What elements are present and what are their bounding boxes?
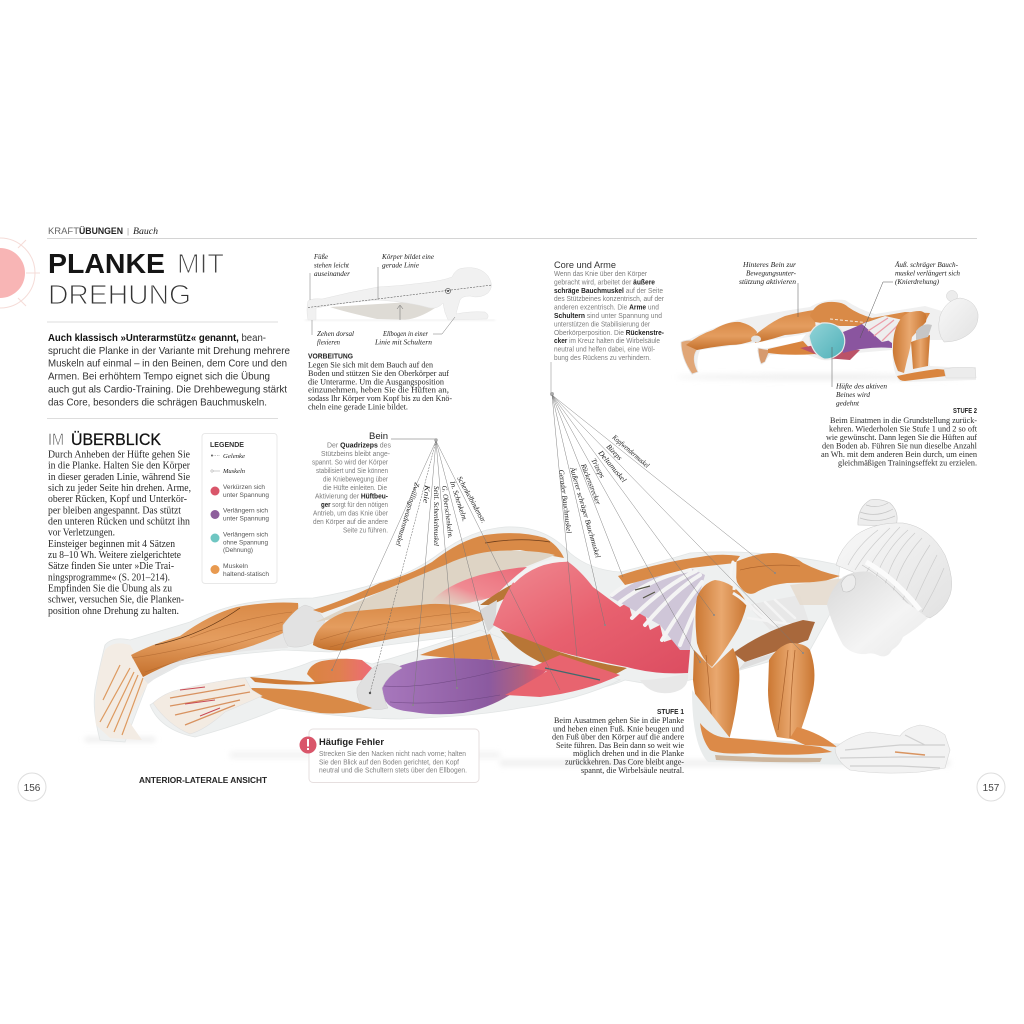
- overview text block: position ohne Drehung zu halten.: [48, 606, 179, 617]
- forearm or upper arm lower section: [693, 648, 739, 740]
- overview text block: Sätze finden Sie unter »Die Trai-: [48, 561, 174, 572]
- text block: Vorbeitung: Boden und stützen Sie den Oberkörper auf: [308, 368, 449, 378]
- panel: legend: [202, 434, 277, 584]
- leg muscle labels: [394, 475, 488, 547]
- step 2 callouts: gedehnt: [836, 398, 860, 408]
- text block: Stufe 1: zurückkehren. Das Core bleibt ange-: [565, 756, 684, 766]
- intro text block: [48, 333, 290, 408]
- leg muscle labels: In. Schenkelm.: [448, 479, 470, 523]
- intro text block: das Core, besonders die schrägen Bauchmuskeln.: [48, 398, 267, 408]
- translucent body halo, upper leg and torso: [94, 527, 840, 742]
- preparation pose callouts: Ellbogen in einer: [382, 329, 428, 338]
- step 2 lower leg: [768, 341, 815, 355]
- text block: Bein: Stützbeins bleibt ange-: [321, 449, 390, 458]
- text block: Bein: den Körper auf die andere: [313, 517, 388, 526]
- overview text block: Empfinden Sie die Übung als zu: [48, 582, 172, 594]
- panel: legend: Muskeln: [223, 563, 248, 570]
- panel: legend: ohne Spannung: [223, 540, 268, 546]
- text block: Stufe 2: den Boden ab. Führen Sie nun dieselbe Anzahl: [822, 440, 978, 450]
- text block: Vorbeitung: [308, 354, 452, 412]
- icon: pink target circle at page edge: [0, 238, 40, 308]
- text block: Stufe 2: Beim Einatmen in die Grundstellung zurück-: [830, 415, 977, 425]
- text block: Stufe 2: gleichmäßigen Trainingseffekt zu erzielen.: [838, 458, 977, 468]
- page header: section and chapter: |: [127, 227, 129, 236]
- head with hair, bun and face: [827, 499, 952, 656]
- text block: Vorbeitung: einzunehmen, heben Sie die Hüften an,: [308, 385, 449, 395]
- text block: Core und Arme: des Stützbeines konzentrisch, auf der: [554, 294, 664, 303]
- upper shin bone: [143, 632, 288, 684]
- upper calf muscles: [131, 602, 298, 677]
- preparation pose callouts: [313, 252, 435, 346]
- panel: legend: Verlängern sich: [223, 532, 268, 538]
- lower calf: [307, 659, 372, 682]
- step 2 callouts: muskel verlängert sich: [895, 268, 960, 278]
- callout: common mistakes: Strecken Sie den Nacken nicht nach vorne; halten: [319, 751, 466, 758]
- hip flexor tendons: [480, 583, 518, 605]
- step 2 supporting arm and shoulder: [893, 311, 976, 381]
- text block: Stufe 1: [552, 709, 685, 775]
- upper thigh top muscle: [313, 533, 564, 613]
- overview text block: ningsprogramme« (S. 201–214).: [48, 572, 170, 583]
- page number 157: [977, 773, 1005, 801]
- text block: Core und Arme: neutral und helfen dabei, eine Wöl-: [554, 345, 655, 354]
- lower foot: [153, 678, 262, 734]
- text block: Bein: spannt. So wird der Körper: [312, 458, 388, 466]
- hair: [836, 523, 952, 618]
- text block: Vorbeitung: die Unterarme. Um die Ausgangsposition: [308, 376, 445, 386]
- pink on thigh: [430, 567, 527, 606]
- page header: section and chapter: [47, 226, 977, 239]
- text block: Bein: [312, 430, 391, 534]
- text block: Stufe 2: an Wh. mit dem anderen Bein durch, um einen: [821, 449, 978, 459]
- lower right hamstring: [420, 634, 500, 660]
- text block: Stufe 2: STUFE 2: [953, 408, 977, 415]
- chest ribs far side: [747, 595, 810, 630]
- overview text block: per bleiben angespannt. Das stützt: [48, 505, 181, 516]
- upper foot: [95, 643, 150, 740]
- illustration: main plank figure, step 1: [85, 499, 952, 773]
- text block: Bein: Seite zu führen.: [343, 526, 388, 534]
- step 2 callouts: [739, 260, 960, 408]
- illustration: preparation pose: [305, 267, 495, 335]
- intro text block: Muskeln auf einmal – in den Beinen, dem Core und den: [48, 358, 287, 370]
- brown deep band under oblique: [500, 630, 627, 680]
- preparation pose callouts: Zehen dorsal: [317, 329, 354, 338]
- text block: Core und Arme: Oberkörperposition. Die Rückenstre-: [554, 328, 664, 337]
- intro text block: Auch klassisch »Unterarmstütz« genannt, bean-: [48, 333, 266, 344]
- text block: Stufe 1: spannt, die Wirbelsäule neutral.: [581, 765, 684, 775]
- text block: Bein: die Kniebewegung über: [323, 474, 388, 484]
- text block: Core und Arme: [554, 259, 664, 362]
- step 2 head: [939, 290, 978, 342]
- hands: [835, 725, 950, 773]
- supporting forearm halo: [692, 690, 870, 765]
- leg muscle labels: Seitl. Schenkelmuskel: [432, 486, 441, 546]
- step 2 purple oblique: [843, 322, 892, 353]
- step 2 front foot: [758, 348, 770, 364]
- step 2 teal hip stretched: [809, 323, 845, 359]
- text block: Vorbeitung: Legen Sie sich mit dem Bauch auf den: [308, 360, 434, 370]
- text block: Stufe 2: kehren. Wiederholen Sie Stufe 1 und 2 so oft: [829, 424, 978, 434]
- panel: legend: Verkürzen sich: [223, 484, 265, 491]
- panel: legend: unter Spannung: [223, 492, 269, 499]
- step 2 callouts: Beines wird: [836, 390, 870, 399]
- text block: Core und Arme: Schultern sind unter Spannung und: [554, 311, 662, 320]
- text block: Bein: stabilisiert und Sie können: [316, 466, 388, 475]
- overview text block: in die Planke. Halten Sie den Körper: [48, 461, 191, 472]
- text block: Bein: Aktivierung der Hüftbeu-: [315, 492, 388, 500]
- step 2 callouts: Hinteres Bein zur: [742, 260, 796, 269]
- panel: legend: Gelenke: [223, 453, 245, 460]
- heading: Im Überblick: ÜBERBLICK: [71, 431, 161, 449]
- step 2 rear thigh: [755, 310, 816, 343]
- deltoid and upper arm: [696, 580, 747, 667]
- far forearm: [790, 727, 837, 747]
- upper back and neck muscles: [733, 553, 840, 594]
- preparation pose callouts: gerade Linie: [382, 260, 420, 270]
- step 2 callouts: (Knierdrehung): [895, 277, 939, 286]
- preparation pose callouts: flexieren: [317, 338, 340, 346]
- text block: Vorbeitung: sodass Ihr Körper vom Kopf bis zu den Knö-: [308, 393, 452, 403]
- callout: common mistakes: [300, 729, 479, 782]
- view caption: ANTERIOR-LATERALE ANSICHT: [139, 776, 267, 785]
- callout: common mistakes: Sie den Blick auf den Boden gerichtet, den Kopf: [319, 759, 459, 766]
- upper thigh lower muscle: [313, 604, 487, 650]
- text block: Stufe 1: Beim Ausatmen gehen Sie in die Planke: [554, 715, 684, 725]
- lower hip muscles: [505, 655, 620, 697]
- leader lines: leg muscles: [331, 438, 560, 706]
- page header: section and chapter: ÜBUNGEN: [79, 226, 123, 236]
- translucent body halo, lower leg: [150, 630, 620, 737]
- overview text block: Einsteiger beginnen mit 4 Sätzen: [48, 539, 175, 550]
- clavicle and scapula bones: [731, 562, 775, 625]
- rib cage: [610, 568, 705, 650]
- text block: Core und Arme: unterstützen die Stabilisierung der: [554, 319, 650, 328]
- step 2 callouts: Bewegungsunter-: [746, 268, 796, 278]
- title: DREHUNG: [48, 279, 191, 310]
- step 2 back foot: [681, 340, 698, 374]
- page number 156: [18, 773, 46, 801]
- text block: Bein: Der Quadrizeps des: [327, 440, 391, 450]
- intro text block: auch gut als Cardio-Training. Die Drehbewegung stärkt: [48, 384, 287, 396]
- preparation pose callouts: Füße: [313, 252, 329, 261]
- leg muscle labels: Knie: [421, 484, 432, 504]
- text block: Core und Arme: bung des Rückens zu verhindern.: [554, 353, 651, 362]
- leg muscle labels: Schenkelbindenstr.: [455, 475, 488, 525]
- step 2 callouts: Hüfte des aktiven: [835, 382, 887, 390]
- step 2 callouts: Äuß. schräger Bauch-: [894, 260, 958, 269]
- text block: Bein: Bein: [369, 430, 388, 441]
- overview text block: [48, 450, 191, 617]
- page number 156: 156: [24, 783, 41, 794]
- step 2 callouts: stützung aktivieren: [739, 277, 796, 286]
- panel: legend: haltend-statisch: [223, 571, 269, 578]
- purple stretched thigh: [380, 658, 547, 714]
- intro text block: Armen. Bei erhöhtem Tempo eignet sich die Übung: [48, 370, 270, 382]
- lower hip bulge: [640, 673, 688, 693]
- text block: Bein: ger sorgt für den nötigen: [321, 500, 388, 509]
- callout: common mistakes: neutral und die Schultern stets über den Ellbogen.: [319, 768, 467, 774]
- preparation pose callouts: auseinander: [314, 269, 350, 278]
- preparation pose callouts: Linie mit Schultern: [374, 338, 432, 346]
- overview text block: zu 8–10 Wh. Weitere zielgerichtete: [48, 550, 182, 561]
- text block: Stufe 2: [821, 408, 978, 468]
- overview text block: vor Verletzungen.: [48, 528, 115, 539]
- core and arm muscle labels: Bizeps: [605, 442, 624, 462]
- step 2 body halo: [683, 300, 976, 382]
- text block: Bein: Antrieb, um das Knie über: [313, 508, 388, 518]
- lower knee: [357, 664, 402, 710]
- bun: [858, 499, 897, 526]
- panel: legend: (Dehnung): [223, 547, 253, 554]
- core and arm muscle labels: Äußerer schräger Bauchmuskel: [568, 465, 603, 559]
- panel: legend: Verlängern sich: [223, 508, 268, 514]
- leg muscle labels: G. Oberschenkelm.: [440, 485, 455, 539]
- panel: legend: Muskeln: [222, 468, 245, 475]
- step 2 ribs: [862, 316, 903, 342]
- torso red oblique: [493, 561, 690, 673]
- title: MIT: [177, 248, 224, 279]
- core and arm muscle labels: Kopfwendermuskel: [610, 432, 651, 470]
- text block: Core und Arme: anderen exzentrisch. Die Arme und: [554, 303, 659, 312]
- icon: exclamation mark: [300, 736, 316, 754]
- text block: Core und Arme: Wenn das Knie über den Körper: [554, 269, 647, 278]
- illustration: step 2 pose: [675, 290, 978, 382]
- text block: Core und Arme: Core und Arme: [554, 259, 616, 270]
- text block: Core und Arme: gebracht wird, arbeitet der äußere: [554, 277, 655, 286]
- text block: Stufe 1: möglich drehen und in die Planke: [573, 748, 684, 758]
- intro text block: sprucht die Planke in der Variante mit Drehung mehrere: [48, 346, 290, 357]
- overview text block: oberer Rücken, Kopf und Unterkör-: [48, 494, 187, 505]
- core and arm muscle labels: [557, 432, 651, 559]
- callout: common mistakes: Häufige Fehler: [319, 737, 385, 747]
- ground shadow: [85, 738, 950, 766]
- forearm on ground: [700, 723, 832, 755]
- preparation pose callouts: stehen leicht: [314, 260, 350, 270]
- face: [827, 572, 928, 656]
- text block: Stufe 1: und heben einen Fuß. Knie beugen und: [553, 723, 685, 733]
- overview text block: schwer, versuchen Sie, die Planken-: [48, 595, 184, 606]
- page number 157: 157: [983, 783, 1000, 794]
- leg muscle labels: Zwillingswadenmuskel: [394, 481, 422, 547]
- preparation pose callouts: Körper bildet eine: [381, 252, 435, 261]
- page header: section and chapter: Bauch: [133, 226, 159, 236]
- neck transition: [790, 578, 845, 605]
- heading: Im Überblick: IM: [48, 431, 64, 449]
- text block: Vorbeitung: VORBEITUNG: [308, 354, 354, 360]
- leader lines: core and arm muscles: [550, 362, 804, 663]
- core and arm muscle labels: Trizeps: [589, 457, 607, 480]
- core and arm muscle labels: Gerader Bauchmuskel: [557, 469, 574, 534]
- title: PLANKE: [48, 248, 165, 279]
- overview text block: den unteren Rücken und schützt ihn: [48, 517, 190, 528]
- text block: Vorbeitung: cheln eine gerade Linie bildet.: [308, 402, 408, 412]
- text block: Core und Arme: schräge Bauchmuskel auf der Seite: [554, 286, 663, 295]
- panel: legend: unter Spannung: [223, 516, 269, 522]
- text block: Stufe 1: STUFE 1: [657, 709, 684, 716]
- text block: Bein: die Hüfte einleiten. Die: [323, 483, 387, 492]
- core and arm muscle labels: Deltamuskel: [596, 448, 628, 484]
- core and arm muscle labels: Rückenstrecker: [579, 462, 603, 506]
- upper thigh beige band: [316, 551, 555, 622]
- overview text block: in dieser geraden Linie, während Sie: [48, 472, 191, 483]
- text block: Core und Arme: cker im Kreuz halten die Wirbelsäule: [554, 336, 660, 345]
- upper knee: [283, 605, 325, 647]
- overview text block: Durch Anheben der Hüfte gehen Sie: [48, 450, 191, 460]
- page header: section and chapter: KRAFT: [48, 226, 80, 236]
- brown chest band: [733, 620, 815, 662]
- step 2 glute and back: [810, 302, 930, 326]
- title: [48, 248, 224, 310]
- lower shin: [247, 688, 372, 713]
- ear: [841, 575, 856, 592]
- back muscle band to shoulder: [618, 555, 740, 585]
- text block: Stufe 2: wie gewünscht. Dann legen Sie die Hüften auf: [826, 432, 977, 442]
- step 2 rear leg calf: [686, 322, 757, 350]
- far arm: [768, 643, 814, 740]
- text block: Stufe 1: den Fuß über den Körper auf die andere: [552, 732, 684, 742]
- text block: Stufe 1: Seite führen. Das Bein dann so weit wie: [556, 740, 684, 750]
- overview text block: sich zu jeder Seite hin drehen. Arme,: [48, 483, 191, 494]
- panel: legend: LEGENDE: [210, 442, 244, 449]
